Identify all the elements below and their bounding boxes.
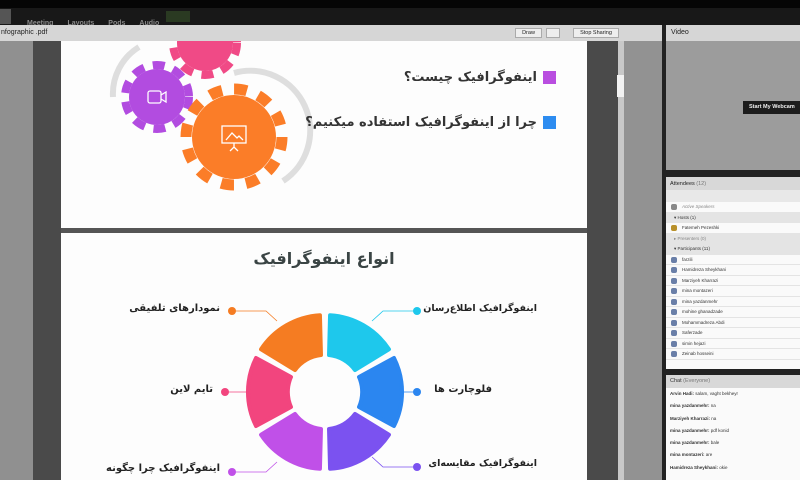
attendees pod: mohine ghanadzade: [682, 309, 723, 314]
slide 1: [61, 41, 587, 228]
labels right: اینفوگرافیک اطلاع‌رسان: [423, 303, 537, 314]
icon: gray arrows: [113, 47, 310, 181]
attendees pod: Marziyeh Kharrazi: [682, 278, 718, 282]
menu bar: Meeting Layouts Pods Audio: [27, 20, 159, 27]
chat pod: Marziyeh Kharrazi: na: [670, 416, 716, 421]
attendees pod: Active Speakers: [682, 204, 715, 209]
bullet 1: اینفوگرافیک چیست؟: [404, 70, 537, 85]
bullet 2: چرا از اینفوگرافیک استفاده میکنیم؟: [305, 115, 537, 130]
video pod: Start My Webcam: [749, 104, 795, 110]
attendees pod: Zeinab hosseini: [682, 351, 714, 356]
pod title bar: nfographic .pdf: [1, 29, 47, 36]
chat pod: [666, 375, 800, 480]
video pod: [666, 41, 800, 170]
icon: orange gear: [186, 89, 282, 185]
connectors: [221, 307, 421, 476]
attendees pod: Mohammadreza Abdi: [682, 320, 725, 324]
pod title bar: Draw: [522, 30, 535, 36]
labels left: نمودارهای تلفیقی: [129, 303, 220, 314]
chat pod: mina yazdanmehr: bale: [670, 440, 719, 445]
pod title bar: Stop Sharing: [580, 30, 612, 36]
attendees pod: Fatemeh Pezeshki: [682, 225, 719, 230]
menu bar: [0, 8, 800, 25]
video header: [666, 25, 800, 41]
icon: audio buttons: [166, 11, 190, 22]
slide 2: اینفوگرافیک مقایسه‌ای: [428, 458, 537, 469]
chat pod: mina yazdanmehr: na: [670, 403, 716, 408]
attendees pod: Attendees (12): [670, 181, 706, 187]
slide 2: اینفوگرافیک چرا چگونه: [106, 463, 220, 474]
attendees pod: simin hejazi: [682, 340, 706, 346]
logo: [0, 9, 11, 24]
attendees pod: ▾ Hosts (1): [674, 214, 696, 220]
icon: pink gear: [173, 11, 237, 75]
attendees pod: farzili: [682, 256, 693, 262]
slide 2: [61, 233, 587, 480]
attendees pod: mina yazdanmehr: [682, 298, 718, 304]
video header: Video: [671, 29, 689, 36]
icon: purple gear: [125, 65, 189, 129]
left gray area: [0, 41, 33, 480]
slide 2: فلوچارت ها: [434, 384, 492, 395]
attendees pod: [666, 177, 800, 369]
attendees pod: Hamidreza Sheykhani: [682, 267, 726, 272]
pod title bar: [0, 25, 662, 41]
chat pod: mina montazeri: are: [670, 452, 712, 457]
title: انواع اینفوگرافیک: [253, 249, 395, 268]
chat pod: Arvin Hadi: salam, vaght bekheyr: [670, 391, 738, 396]
chat pod: mina yazdanmehr: pdf konid: [670, 428, 729, 433]
attendees pod: ▾ Participants (11): [674, 246, 710, 251]
chat pod: Hamidreza Sheykhani: okie: [670, 465, 728, 470]
top title bar: [0, 0, 800, 8]
chat pod: Chat (Everyone): [670, 378, 710, 384]
attendees pod: Saferzade: [682, 330, 703, 335]
attendees pod: ▸ Presenters (0): [674, 236, 706, 240]
slide 2: تایم لاین: [170, 384, 213, 395]
attendees pod: mina montazeri: [682, 288, 713, 293]
ring chart: [221, 307, 421, 476]
